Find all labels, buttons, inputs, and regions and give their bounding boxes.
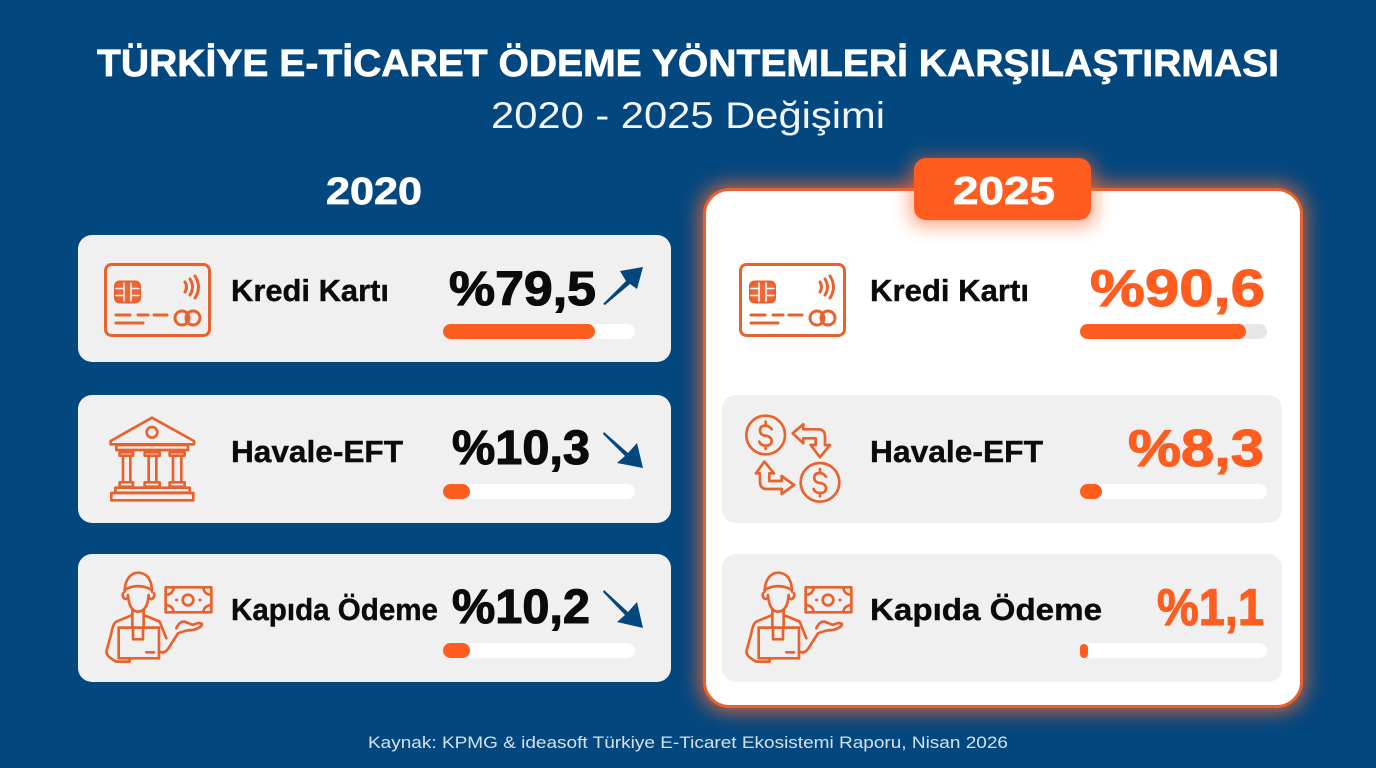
label: Kredi Kartı — [870, 273, 1029, 308]
icon: money transfer — [746, 416, 839, 502]
row: 2025 Havale-EFT — [722, 395, 1282, 523]
heading: 2020: 2020 — [326, 171, 422, 213]
row: 2025 Kapıda Ödeme — [722, 554, 1282, 682]
panel: 2020 Kapıda Ödeme — [78, 554, 671, 682]
value: %79,5 — [449, 263, 596, 316]
progress bar — [1080, 643, 1267, 658]
value: %90,6 — [1090, 260, 1265, 318]
value: %8,3 — [1128, 420, 1264, 478]
value: %1,1 — [1157, 579, 1264, 637]
progress bar — [443, 484, 635, 499]
icon: credit card — [740, 264, 844, 336]
icon: courier with cash — [106, 573, 211, 662]
icon: credit card — [106, 264, 210, 336]
panel: 2020 Havale-EFT — [78, 395, 671, 523]
progress bar — [1080, 484, 1267, 499]
icon: bank — [111, 418, 194, 500]
arrow up — [603, 267, 643, 305]
title: TÜRKİYE E-TİCARET ÖDEME YÖNTEMLERİ KARŞILAŞTIRMASI — [97, 42, 1279, 85]
label: Havale-EFT — [231, 434, 403, 469]
icon: courier with cash — [746, 573, 851, 662]
label: Kapıda Ödeme — [231, 592, 438, 627]
arrow down — [603, 590, 643, 628]
subtitle: 2020 - 2025 Değişimi — [491, 95, 885, 136]
badge: 2025 — [910, 158, 1095, 226]
panel: 2025 — [700, 158, 1305, 711]
badge: 2025: 2025 — [953, 170, 1055, 213]
progress bar — [443, 324, 635, 339]
value: %10,3 — [452, 422, 590, 475]
arrow down — [603, 432, 643, 468]
label: Kredi Kartı — [231, 273, 389, 308]
progress bar — [443, 643, 635, 658]
source footnote: Kaynak: KPMG & ideasoft Türkiye E-Ticaret Ekosistemi Raporu, Nisan 2026 — [368, 733, 1008, 752]
label: Kapıda Ödeme — [870, 592, 1102, 627]
label: Havale-EFT — [870, 434, 1043, 469]
progress bar — [1080, 324, 1267, 339]
panel: 2020 Kredi Kartı — [78, 235, 671, 362]
row: 2025 Kredi Kartı — [740, 260, 1267, 339]
value: %10,2 — [452, 581, 590, 634]
